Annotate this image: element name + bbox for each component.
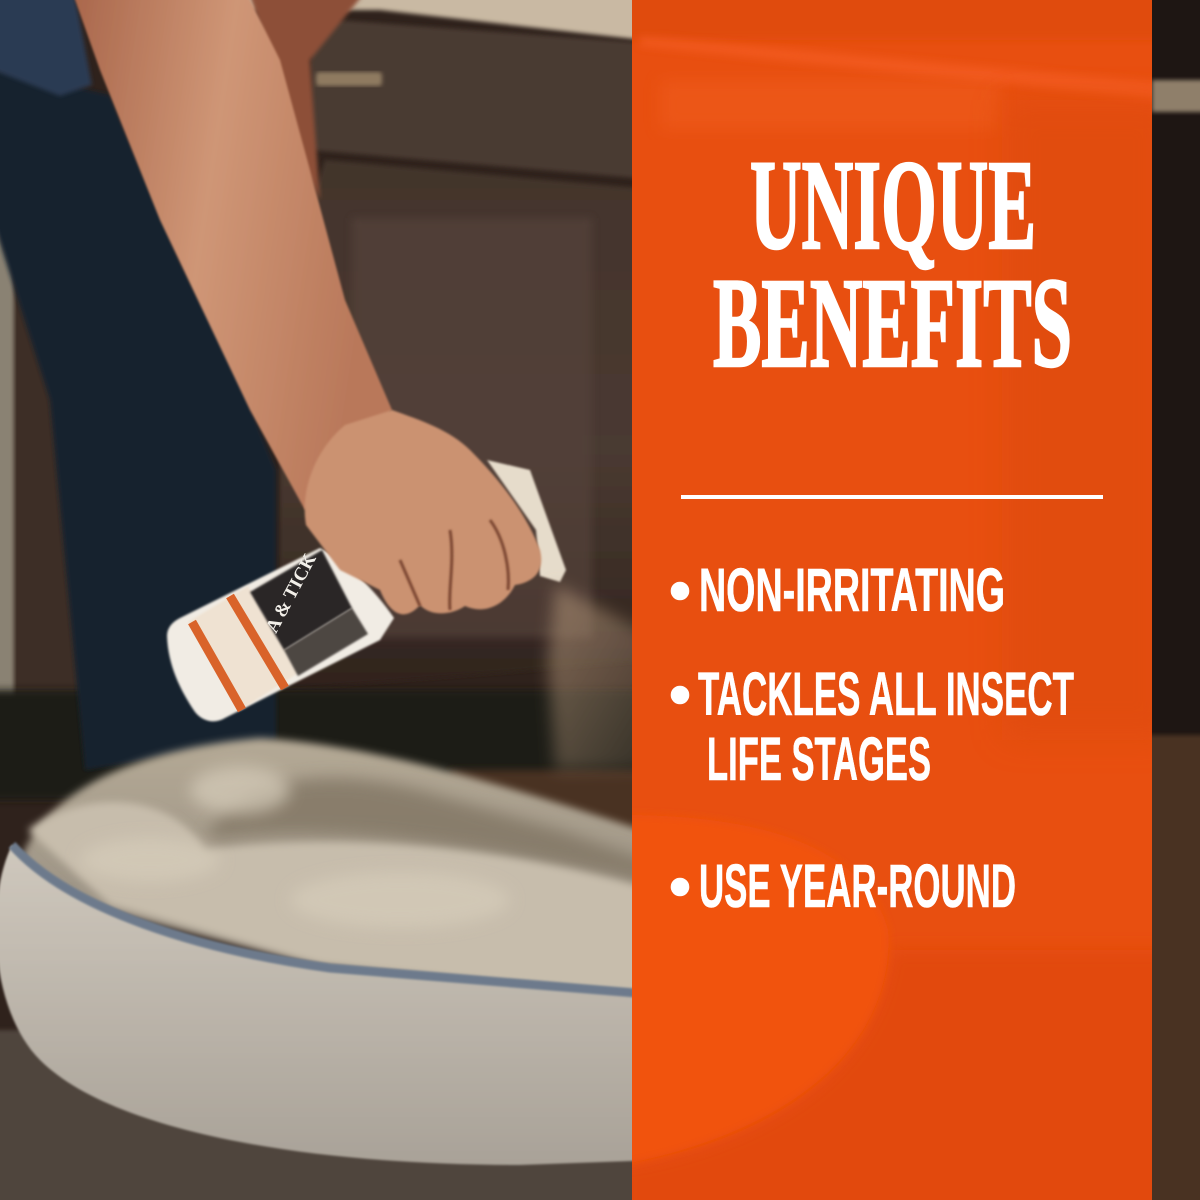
bottle label panel [188, 586, 300, 710]
kitchen counter [240, 0, 660, 42]
panel ghost floor [620, 950, 1170, 1200]
bottle grey label [284, 608, 368, 676]
bed inner plush [21, 732, 632, 966]
benefit: tackles all insect life stages: LIFE STAGES [707, 725, 931, 793]
cabinet door inset panel [352, 218, 592, 638]
benefits list [671, 556, 1074, 920]
bed inner shadow [205, 778, 660, 885]
benefit: non-irritating [671, 556, 1005, 624]
plaid shirt [0, 0, 92, 96]
panel ghost top band [620, 0, 1160, 40]
bottle white body [167, 548, 394, 721]
left wall strip [0, 190, 14, 770]
benefit: non-irritating: NON-IRRITATING [699, 556, 1005, 624]
title [713, 134, 1072, 394]
bottle label text: A & TICK [262, 550, 321, 636]
finger shadows [400, 520, 508, 610]
bed base [0, 845, 660, 1165]
left wall cabinet [15, 296, 76, 689]
divider [681, 495, 1103, 499]
dark floor shadow [0, 690, 660, 800]
drawer handle [316, 72, 382, 86]
jeans [0, 65, 276, 770]
hand [305, 410, 541, 614]
cabinet drawer [310, 18, 660, 180]
benefit: use year-round [671, 852, 1016, 920]
panel ghost right column [1002, 100, 1172, 740]
spray mist [540, 582, 632, 776]
bed front cushion [28, 802, 660, 1000]
right side dark [1152, 0, 1200, 735]
right side counter [1152, 80, 1200, 112]
benefit: tackles all insect life stages [671, 660, 1074, 793]
panel ghost bed [620, 815, 888, 1165]
bottle orange stripes [192, 596, 285, 710]
panel: orange benefits [620, 0, 1172, 1200]
bed piping [12, 845, 660, 995]
panel ghost cabinet [660, 80, 1000, 130]
panel ghost counter line [640, 36, 1160, 100]
spray trigger [487, 460, 566, 582]
right side floor [1152, 733, 1200, 1200]
cabinet door [279, 160, 632, 616]
back hand [250, 0, 362, 198]
bottle black label [250, 550, 352, 650]
wood floor [450, 767, 632, 828]
bed plush highlights [80, 766, 510, 928]
arm [68, 0, 392, 510]
lower floor [0, 1030, 660, 1200]
